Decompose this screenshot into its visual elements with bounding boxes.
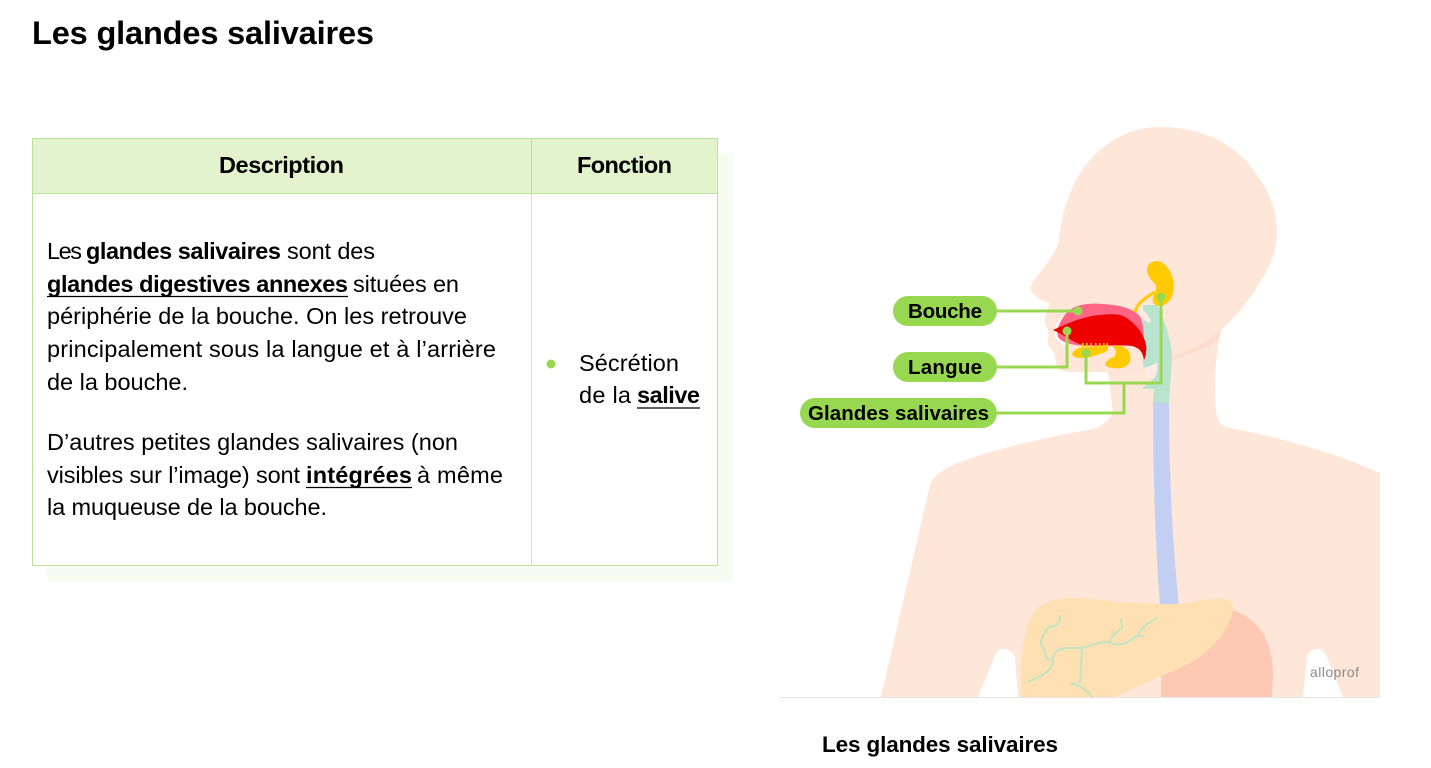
label: Glandes salivaires: Glandes salivaires — [808, 402, 989, 425]
table body — [32, 138, 718, 566]
mouth — [1057, 304, 1144, 346]
panel: table — [32, 138, 733, 581]
label: Glandes salivaires — [800, 292, 1166, 428]
liver veins — [1028, 615, 1158, 697]
table shadow — [47, 153, 733, 581]
stomach — [1161, 609, 1273, 697]
function text: salive — [637, 382, 700, 408]
watermark: alloprof — [1310, 664, 1359, 680]
pharynx — [1142, 305, 1172, 403]
body silhouette — [881, 127, 1380, 697]
title: Les glandes salivaires — [32, 15, 374, 51]
liver — [1021, 598, 1233, 697]
function text — [546, 350, 700, 408]
label: Bouche — [893, 296, 1082, 326]
diagram: digestive anatomy — [780, 127, 1380, 698]
description text — [47, 238, 503, 520]
tongue — [1053, 314, 1146, 360]
description text: périphérie de la bouche. On les retrouve — [47, 303, 467, 329]
neck shadow — [1108, 330, 1221, 373]
mouth highlight — [1054, 316, 1072, 346]
description text: visibles sur l’image) sont — [47, 462, 300, 488]
esophagus — [1153, 403, 1179, 606]
label: Bouche: Bouche — [908, 300, 982, 323]
description text: situées en — [353, 271, 459, 297]
description text: sont des — [287, 238, 375, 264]
description text: Les — [47, 238, 82, 264]
pale patches — [1138, 307, 1151, 323]
caption: Les glandes salivaires — [822, 732, 1058, 757]
description text: de la bouche. — [47, 369, 188, 395]
description text: glandes salivaires — [86, 238, 281, 264]
table header — [32, 138, 718, 194]
description text: intégrées — [306, 462, 412, 488]
table header: Description — [219, 152, 344, 178]
function text: Sécrétion — [579, 350, 679, 376]
arm gaps — [978, 649, 1018, 697]
description text: principalement sous la langue et à l’arrière — [47, 336, 496, 362]
description text: glandes digestives annexes — [47, 271, 348, 297]
image baseline — [780, 696, 1380, 698]
description text: la muqueuse de la bouche. — [47, 494, 327, 520]
salivary glands — [1072, 261, 1174, 368]
description text: D’autres petites glandes salivaires (non — [47, 429, 458, 455]
function text: de la — [579, 382, 632, 408]
label: Langue — [893, 326, 1072, 382]
label: Langue: Langue — [908, 356, 982, 379]
table header: Fonction — [577, 152, 672, 178]
description text: à même — [417, 462, 503, 488]
